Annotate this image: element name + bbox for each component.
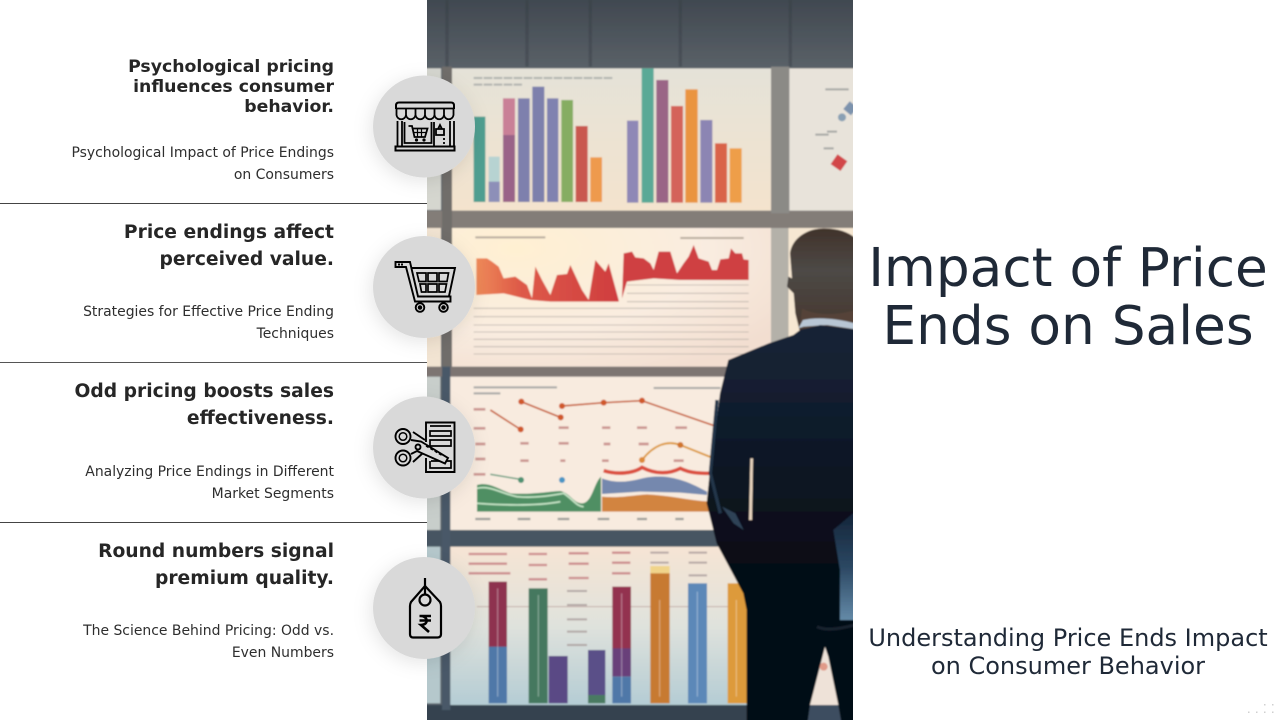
item 1 text: on Consumers — [234, 167, 334, 183]
icon: scissors cutting coupon — [373, 396, 475, 498]
icon circles — [368, 76, 476, 666]
item 2 heading — [124, 222, 334, 270]
item 4 text: The Science Behind Pricing: Odd vs. — [83, 623, 334, 639]
item 4 text: Even Numbers — [232, 645, 334, 661]
item 4 heading — [98, 540, 334, 588]
item 2 heading: Price endings affect — [124, 222, 334, 242]
item 3 heading: effectiveness. — [187, 408, 334, 428]
item 2 text — [83, 304, 334, 342]
divider lines — [0, 203, 427, 523]
item 2 text: Strategies for Effective Price Ending — [83, 304, 334, 320]
item 3 heading: Odd pricing boosts sales — [74, 380, 334, 402]
title: Ends on Sales — [882, 295, 1254, 357]
icon: storefront with cart — [373, 76, 475, 178]
icon: shopping cart — [373, 236, 475, 338]
decorative dots — [1248, 704, 1274, 713]
item 1 heading — [128, 56, 334, 116]
window frame and upper wall — [420, 0, 860, 720]
panel: top right diagram — [789, 68, 859, 211]
subtitle: Understanding Price Ends Impact — [868, 624, 1268, 652]
subtitle: on Consumer Behavior — [931, 652, 1205, 680]
panel: line and area chart — [450, 377, 727, 530]
item 3 text: Market Segments — [212, 486, 334, 502]
subtitle — [868, 624, 1268, 680]
item 1 heading: behavior. — [244, 96, 334, 116]
title: Impact of Price — [868, 237, 1268, 299]
item 3 text — [85, 464, 334, 502]
panel: red area chart — [452, 228, 771, 367]
item 3 text: Analyzing Price Endings in Different — [85, 464, 334, 480]
item 2 heading: perceived value. — [160, 248, 334, 270]
item 2 text: Techniques — [257, 326, 334, 342]
icon: rupee price tag — [373, 557, 475, 659]
item 1 text — [71, 145, 334, 183]
panel: top bar charts — [452, 68, 771, 211]
item 4 text — [83, 623, 334, 661]
item 4 heading: Round numbers signal — [98, 540, 334, 562]
title — [868, 237, 1268, 357]
item 1 text: Psychological Impact of Price Endings — [71, 145, 334, 161]
person: man in dark suit seen from behind — [707, 228, 860, 720]
panel: lower bar chart — [450, 547, 840, 705]
item 3 heading — [74, 380, 334, 428]
item 4 heading: premium quality. — [155, 568, 334, 588]
item 1 heading: influences consumer — [133, 76, 334, 96]
item 1 heading: Psychological pricing — [128, 56, 334, 76]
photo: businessman viewing chart wall — [427, 0, 853, 720]
